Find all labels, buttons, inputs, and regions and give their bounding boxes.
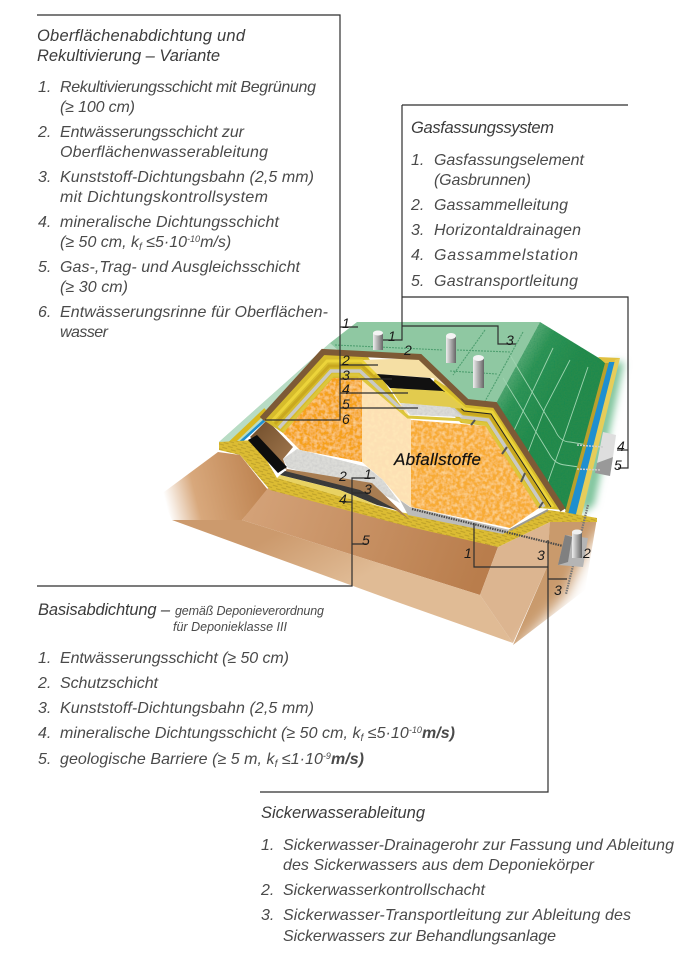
number labels on illustration: 3: [554, 582, 562, 598]
base liner layers: [248, 420, 567, 547]
drainage channel strips: [228, 357, 620, 518]
number labels on illustration: 1: [342, 315, 350, 331]
number labels on illustration: 2: [582, 545, 591, 561]
text block: gas collection: [410, 119, 585, 290]
number labels on illustration: 5: [614, 457, 622, 473]
landfill cross-section illustration: [160, 322, 650, 690]
number labels on illustration: 3: [537, 547, 545, 563]
text block: surface sealing: 6.: [38, 304, 51, 321]
text block: leachate drainage: Sickerwasser-Transportleitung zur Ableitung des: [283, 907, 631, 924]
text block: base sealing: Kunststoff-Dichtungsbahn (2,5 mm): [60, 700, 314, 717]
number labels on illustration: 3: [364, 481, 372, 497]
text block: gas collection: 1.: [411, 152, 424, 169]
text block: base sealing: geologische Barriere (≥ 5 m, k: [60, 751, 275, 768]
text block: leachate drainage: 1.: [261, 837, 274, 854]
text block: base sealing: m/s): [331, 751, 364, 768]
text block: surface sealing: Gas-,Trag- und Ausgleichsschicht: [60, 259, 301, 276]
number labels on illustration: 2: [341, 352, 350, 368]
text block: leachate drainage: 2.: [260, 882, 274, 899]
icon: gas collection wells: [373, 330, 484, 388]
heading: base sealing: Basisabdichtung –: [38, 601, 171, 619]
yellow barrier layer: [219, 440, 597, 547]
text block: base sealing: m/s): [422, 725, 455, 742]
text block: base sealing: f: [275, 759, 279, 770]
text block: leachate drainage: des Sickerwassers aus dem Deponiekörper: [283, 857, 595, 874]
text block: gas collection: Gasfassungselement: [434, 152, 585, 169]
icon: leachate control shaft: [558, 505, 588, 594]
heading: base sealing: gemäß Deponieverordnung: [175, 604, 324, 618]
text block: gas collection: 3.: [411, 222, 424, 239]
text block: base sealing: Entwässerungsschicht (≥ 50 cm): [60, 650, 289, 667]
waste body: [280, 372, 539, 528]
text block: surface sealing: f: [139, 242, 143, 253]
text block: base sealing: Schutzschicht: [60, 675, 159, 692]
text block: surface sealing: 4.: [38, 214, 51, 231]
text block: base sealing: ≤1·10: [277, 751, 323, 768]
text block: base sealing: 5.: [38, 751, 51, 768]
heading: base sealing: für Deponieklasse III: [173, 620, 288, 634]
number labels on illustration: 1: [388, 328, 396, 344]
text block: surface sealing: -10: [187, 234, 200, 244]
text block: surface sealing: m/s): [200, 234, 231, 251]
text block: leachate drainage: 3.: [261, 907, 274, 924]
number labels on illustration: 1: [364, 466, 372, 482]
text block: gas collection: Gastransportleitung: [434, 273, 578, 290]
text block: surface sealing: Oberflächenwasserableitung: [60, 144, 268, 161]
text block: gas collection: 4.: [411, 247, 424, 264]
text block: surface sealing: [37, 27, 328, 341]
leader lines: [37, 15, 628, 792]
text block: surface sealing: Entwässerungsschicht zur: [60, 124, 245, 141]
heading: surface sealing: Rekultivierung – Variante: [37, 47, 220, 65]
text block: leachate drainage: Sickerwasserkontrollschacht: [283, 882, 486, 899]
text block: base sealing: 1.: [38, 650, 51, 667]
number labels on illustration: 6: [342, 411, 350, 427]
text block: surface sealing: Kunststoff-Dichtungsbahn (2,5 mm): [60, 169, 314, 186]
text block: leachate drainage: [260, 804, 674, 945]
number labels on illustration: 2: [338, 468, 347, 484]
number labels on illustration: 5: [362, 532, 370, 548]
text block: surface sealing: (≥ 30 cm): [60, 279, 128, 296]
text block: base sealing: -10: [409, 725, 422, 735]
text block: surface sealing: 1.: [38, 79, 51, 96]
heading: leachate drainage: Sickerwasserableitung: [261, 804, 426, 822]
cap sealing layers: [262, 352, 563, 510]
gas wells: [471, 420, 543, 508]
text block: surface sealing: Rekultivierungsschicht mit Begrünung: [60, 79, 316, 96]
text block: base sealing: 4.: [38, 725, 51, 742]
text block: gas collection: Gassammelstation: [434, 247, 578, 264]
heading: gas collection: Gasfassungssystem: [411, 119, 554, 137]
text block: surface sealing: 3.: [38, 169, 51, 186]
number labels on illustration: 4: [339, 491, 347, 507]
number labels on illustration: 4: [617, 438, 625, 454]
text block: gas collection: 2.: [410, 197, 424, 214]
text block: base sealing: f: [360, 733, 364, 744]
text block: base sealing: -9: [323, 751, 331, 761]
text block: leachate drainage: Sickerwasser-Drainagerohr zur Fassung und Ableitung: [283, 837, 674, 854]
text block: surface sealing: mineralische Dichtungsschicht: [60, 214, 280, 231]
text block: surface sealing: mit Dichtungskontrollsystem: [60, 189, 268, 206]
heading: surface sealing: [37, 27, 246, 65]
text block: surface sealing: Entwässerungsrinne für Oberflächen-: [60, 304, 328, 321]
text block: gas collection: Horizontaldrainagen: [434, 222, 581, 239]
earth embankment: [160, 452, 650, 690]
text block: leachate drainage: Sickerwassers zur Behandlungsanlage: [283, 928, 556, 945]
number labels on illustration: 2: [403, 342, 412, 358]
icon: gas collection station: [577, 432, 616, 476]
number labels on illustration: 1: [464, 545, 472, 561]
waste label: Abfallstoffe: [393, 450, 481, 469]
text block: surface sealing: 2.: [37, 124, 51, 141]
text block: surface sealing: (≥ 50 cm, k: [60, 234, 139, 251]
text block: base sealing: mineralische Dichtungsschicht (≥ 50 cm, k: [60, 725, 360, 742]
number labels on illustration: [338, 315, 625, 598]
text block: base sealing: 3.: [38, 700, 51, 717]
number labels on illustration: 3: [506, 332, 514, 348]
text block: surface sealing: (≥ 100 cm): [60, 99, 135, 116]
text block: base sealing: [37, 601, 455, 770]
text block: gas collection: 5.: [411, 273, 424, 290]
text block: surface sealing: ≤5·10: [142, 234, 187, 251]
text block: base sealing: ≤5·10: [363, 725, 409, 742]
number labels on illustration: 3: [342, 367, 350, 383]
text block: gas collection: (Gasbrunnen): [434, 172, 531, 189]
heading: base sealing: [38, 601, 324, 634]
green cover surface: [219, 322, 624, 516]
text block: surface sealing: 5.: [38, 259, 51, 276]
heading: surface sealing: Oberflächenabdichtung und: [37, 27, 246, 45]
number labels on illustration: 4: [342, 381, 350, 397]
number labels on illustration: 5: [342, 396, 350, 412]
text block: surface sealing: wasser: [60, 324, 109, 341]
text block: gas collection: Gassammelleitung: [434, 197, 568, 214]
text block: base sealing: 2.: [37, 675, 51, 692]
